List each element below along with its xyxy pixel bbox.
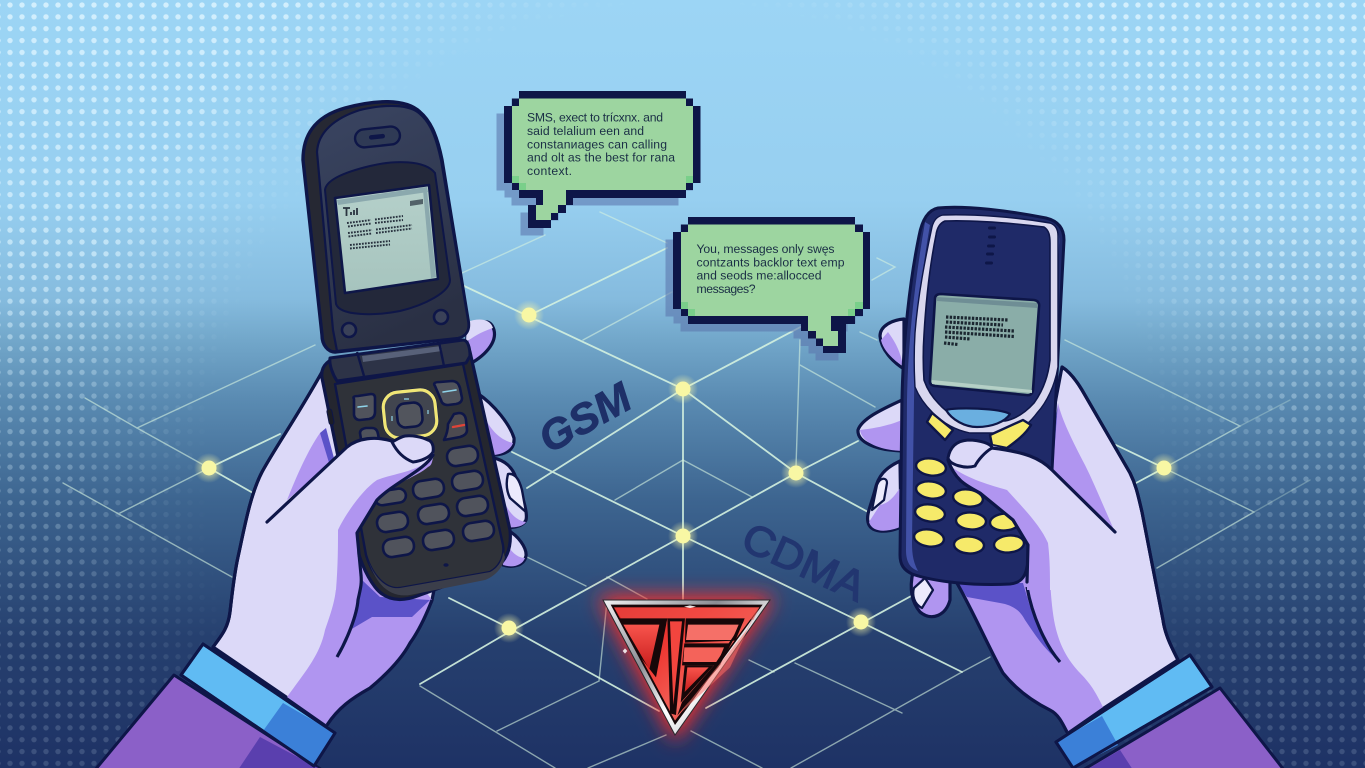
network nodes	[194, 300, 1179, 643]
silver ring	[914, 215, 1058, 433]
signal and battery icons	[343, 208, 357, 216]
flip front face	[317, 106, 469, 351]
speech bubble: messages reply	[666, 217, 870, 360]
left hand: palm and fingers	[213, 320, 526, 725]
screen pixels	[944, 317, 1014, 344]
hinge	[330, 340, 470, 381]
bubble 2 text: contzants backlor text emp	[696, 255, 845, 269]
screen message pixels	[347, 216, 412, 248]
bubble 2 text: messages?	[696, 282, 756, 296]
navy face	[923, 221, 1050, 421]
speaker slots	[985, 226, 996, 264]
yellow function keys	[927, 413, 1031, 448]
bubble 1 text: SMS, exect to trícxnx. and	[527, 110, 663, 124]
round buttons	[434, 310, 448, 324]
right sleeve and cuff	[1056, 655, 1284, 768]
bubble 2 text: You, messages only swęs	[696, 242, 834, 256]
bubble 1 corner pixels	[512, 176, 693, 190]
bubble 1 shadow	[496, 98, 693, 236]
bubble 2 fill	[681, 224, 863, 346]
lower keypad body	[322, 341, 510, 599]
bubble 1 outline	[504, 91, 700, 228]
mic hole	[443, 563, 449, 567]
screen bezel	[325, 162, 450, 314]
navigation ring	[380, 386, 440, 442]
bubble 2 shadow	[666, 224, 862, 360]
candybar phone (CDMA)	[900, 207, 1064, 585]
bubble 1 text: and olt as the best for rana	[527, 151, 675, 165]
speech bubble: SMS question	[496, 91, 700, 236]
bubble 1 text: said telalium een and	[527, 124, 644, 138]
right hand: palm and fingers	[858, 319, 1178, 732]
side button	[327, 409, 334, 425]
right hand: thumb	[948, 440, 1115, 590]
bubble 1 text	[527, 110, 675, 178]
keypad keys	[354, 381, 495, 558]
key accents	[358, 390, 464, 427]
bubble 1 text: constanиages can calling	[527, 137, 667, 151]
network grid lines	[63, 212, 1310, 768]
yellow number keys	[913, 456, 1025, 554]
blue arc key	[946, 408, 1010, 427]
bubble 2 text: and seods me:allocced	[696, 269, 822, 283]
label: GSM: GSM	[531, 373, 640, 462]
flip back edge	[303, 102, 469, 352]
earpiece	[354, 126, 401, 148]
nokia screen	[930, 294, 1039, 395]
flip screen	[335, 185, 438, 293]
bubble 1 fill	[512, 98, 693, 220]
logo: red TF shield	[598, 596, 775, 742]
label: CDMA: CDMA	[735, 513, 873, 610]
left sleeve and cuff	[95, 644, 335, 768]
flip phone (GSM)	[303, 102, 510, 599]
bubble 2 outline	[673, 217, 870, 353]
bubble 2 text	[696, 242, 845, 296]
body	[900, 207, 1064, 585]
bubble 1 text: context.	[527, 164, 572, 178]
left hand: thumb	[267, 436, 434, 590]
bubble 2 corner pixels	[681, 302, 863, 316]
